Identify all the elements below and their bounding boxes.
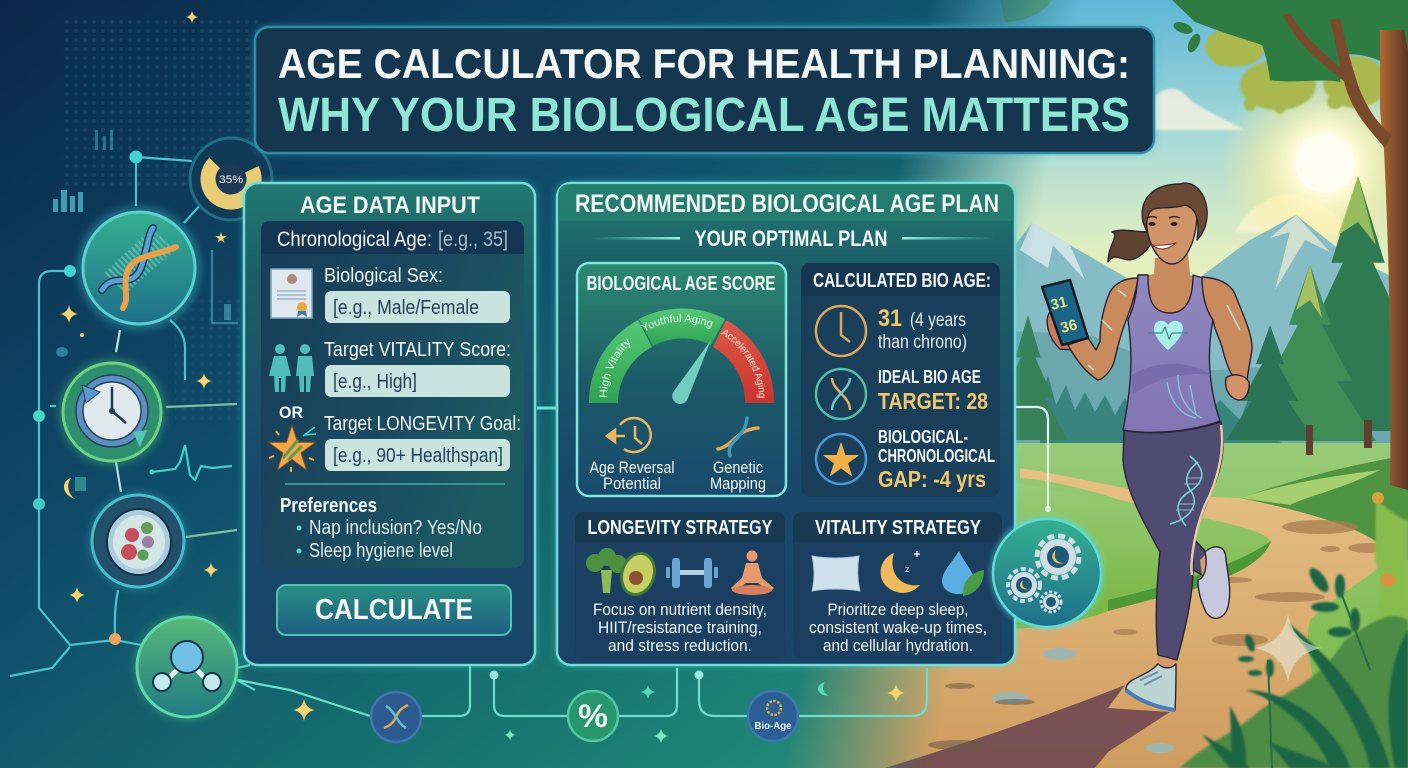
back calf bbox=[1190, 538, 1208, 575]
vitality text: Prioritize deep sleep, bbox=[828, 600, 968, 619]
vitality text: and cellular hydration. bbox=[823, 636, 973, 655]
heading: age data input: AGE DATA INPUT bbox=[300, 192, 480, 219]
stat: gap: CHRONOLOGICAL bbox=[878, 446, 995, 466]
arm glow details bbox=[1088, 290, 1240, 370]
icon: avocado bbox=[616, 549, 660, 599]
panel: longevity strategy: LONGEVITY STRATEGY bbox=[588, 517, 773, 539]
icon: age reversal clock bbox=[607, 418, 651, 452]
left connector lines bbox=[10, 157, 255, 690]
icon: reversing clock bbox=[58, 358, 166, 466]
icon: dna badge bbox=[371, 692, 421, 742]
back shoe bbox=[1198, 547, 1230, 618]
icon: percent badge: % bbox=[578, 698, 608, 734]
field: biological sex bbox=[324, 265, 510, 323]
front ankle bbox=[1157, 652, 1177, 672]
calculate button bbox=[277, 585, 511, 635]
preferences list: Sleep hygiene level bbox=[309, 540, 453, 562]
longevity text: and stress reduction. bbox=[608, 636, 752, 655]
vitality text bbox=[809, 600, 987, 655]
stat: ideal target bbox=[878, 367, 988, 414]
icon: bio-age badge: Bio-Age bbox=[754, 721, 792, 732]
heading: plan: RECOMMENDED BIOLOGICAL AGE PLAN bbox=[575, 190, 999, 218]
preferences list: Nap inclusion? Yes/No bbox=[309, 517, 482, 539]
icon: certificate bbox=[271, 269, 312, 318]
arrow between panels bbox=[537, 401, 566, 415]
label: age reversal bbox=[590, 458, 674, 493]
subheading: optimal plan: YOUR OPTIMAL PLAN bbox=[694, 226, 888, 251]
stat: ideal target: IDEAL BIO AGE bbox=[878, 367, 981, 387]
label: genetic mapping bbox=[710, 458, 766, 493]
field: vitality: [e.g., High] bbox=[333, 371, 417, 393]
fist bbox=[1226, 375, 1249, 400]
title panel bbox=[254, 26, 1155, 154]
gauge: High Vitality bbox=[599, 338, 630, 397]
stat: gap: BIOLOGICAL- bbox=[878, 427, 968, 447]
preferences list: Preferences bbox=[280, 495, 377, 517]
icon: gears circle bbox=[989, 515, 1105, 631]
label: age reversal: Potential bbox=[603, 474, 661, 493]
heart emblem bbox=[1148, 321, 1188, 350]
field: longevity: [e.g., 90+ Healthspan] bbox=[333, 445, 503, 467]
sparkles and moons bbox=[60, 11, 905, 744]
face bbox=[1146, 201, 1197, 264]
hair bbox=[1142, 183, 1207, 240]
icon: cell dish bbox=[88, 491, 188, 591]
icon: broccoli bbox=[586, 548, 627, 593]
field: vitality: Target VITALITY Score: bbox=[324, 339, 511, 361]
bottom connectors bbox=[238, 407, 1048, 716]
label: age reversal: Age Reversal bbox=[590, 458, 674, 477]
gauge: Accelerated Aging bbox=[721, 330, 765, 398]
connector nodes bbox=[490, 506, 1051, 680]
icon: star bbox=[816, 434, 866, 484]
icon: genetic mapping dna bbox=[718, 418, 758, 456]
panel: vitality strategy bbox=[793, 512, 1002, 659]
shading on tank bbox=[1132, 364, 1212, 395]
stat: gap: GAP: -4 yrs bbox=[878, 466, 986, 492]
field: longevity: Target LONGEVITY Goal: bbox=[324, 413, 521, 435]
vitality text: consistent wake-up times, bbox=[809, 618, 987, 637]
ponytail bbox=[1108, 230, 1153, 262]
panel: age data input bbox=[243, 182, 536, 666]
icon: moon: z bbox=[905, 564, 910, 574]
icon: molecule bbox=[133, 613, 241, 721]
panel: longevity strategy bbox=[575, 512, 785, 659]
field: vitality bbox=[324, 339, 511, 397]
viewer-left arm bbox=[1068, 278, 1138, 380]
icon: people bbox=[269, 344, 314, 392]
panel: calculated bio age: CALCULATED BIO AGE: bbox=[813, 270, 991, 292]
label: genetic mapping: Genetic bbox=[713, 458, 763, 477]
longevity text bbox=[593, 600, 767, 655]
panel: recommended plan bbox=[552, 178, 1020, 670]
or label: OR bbox=[279, 403, 303, 422]
donut chart 35% bbox=[190, 138, 272, 220]
stat: 31 bbox=[878, 305, 967, 353]
left connector nodes bbox=[33, 150, 154, 645]
icon: pillow bbox=[812, 556, 860, 591]
stat: ideal target: TARGET: 28 bbox=[878, 388, 988, 414]
phone: 36 bbox=[1059, 316, 1079, 337]
chronological age row bbox=[261, 221, 524, 254]
icon: moon bbox=[881, 551, 920, 593]
panel: vitality strategy: VITALITY STRATEGY bbox=[815, 517, 982, 539]
title line 2: WHY YOUR BIOLOGICAL AGE MATTERS bbox=[278, 89, 1130, 142]
preferences list bbox=[280, 495, 482, 562]
panel: biological age score bbox=[576, 262, 788, 498]
chronological age row: [e.g., 35] bbox=[438, 228, 508, 251]
icon: drop and leaf bbox=[942, 551, 984, 596]
icon: clock bbox=[816, 306, 866, 356]
stat: gap bbox=[878, 427, 995, 492]
viewer-right arm bbox=[1202, 277, 1252, 380]
gauge: Youthful Aging bbox=[640, 314, 713, 330]
longevity text: HIIT/resistance training, bbox=[598, 618, 762, 637]
icon: dumbbell bbox=[666, 558, 718, 588]
icon: dna bbox=[816, 369, 866, 419]
back ankle bbox=[1200, 552, 1210, 575]
label: genetic mapping: Mapping bbox=[710, 474, 766, 493]
title line 1: AGE CALCULATOR FOR HEALTH PLANNING: bbox=[278, 40, 1130, 87]
icon: bio-age badge bbox=[748, 691, 798, 741]
calculate button: CALCULATE bbox=[315, 594, 473, 626]
neck and chest bbox=[1146, 252, 1196, 316]
chronological age row: Chronological Age: bbox=[277, 228, 432, 251]
icon: percent badge bbox=[568, 691, 618, 741]
icon: star bbox=[268, 425, 316, 472]
field: biological sex: Biological Sex: bbox=[324, 265, 443, 287]
front shoe bbox=[1126, 664, 1176, 710]
decorative dots bbox=[60, 20, 260, 190]
longevity text: Focus on nutrient density, bbox=[593, 600, 767, 619]
field: longevity bbox=[324, 413, 521, 471]
forest scene bbox=[789, 0, 1408, 768]
donut chart 35%: 35% bbox=[219, 174, 243, 186]
small bar charts bbox=[53, 130, 231, 320]
tank top bbox=[1123, 275, 1220, 432]
facial features bbox=[1147, 216, 1180, 249]
dna on leg bbox=[1170, 456, 1202, 526]
phone: 31 bbox=[1049, 293, 1069, 314]
legs bbox=[1123, 422, 1223, 660]
panel: biological age score: BIOLOGICAL AGE SCORE bbox=[586, 273, 776, 295]
hand print detail bbox=[1167, 375, 1202, 418]
stat: 31: than chrono) bbox=[878, 332, 967, 353]
phone hand bbox=[1047, 312, 1075, 350]
stat: 31: 31 bbox=[878, 305, 902, 332]
icon: DNA circle bbox=[77, 206, 201, 330]
gauge bbox=[589, 308, 774, 404]
field: biological sex: [e.g., Male/Female bbox=[333, 297, 479, 319]
phone bbox=[1042, 280, 1088, 345]
stat: 31: (4 years bbox=[910, 310, 966, 331]
inner form panel bbox=[261, 221, 524, 568]
panel: calculated bio age bbox=[801, 263, 1000, 497]
icon: meditating figure bbox=[731, 550, 774, 595]
runner illustration bbox=[1042, 183, 1252, 710]
